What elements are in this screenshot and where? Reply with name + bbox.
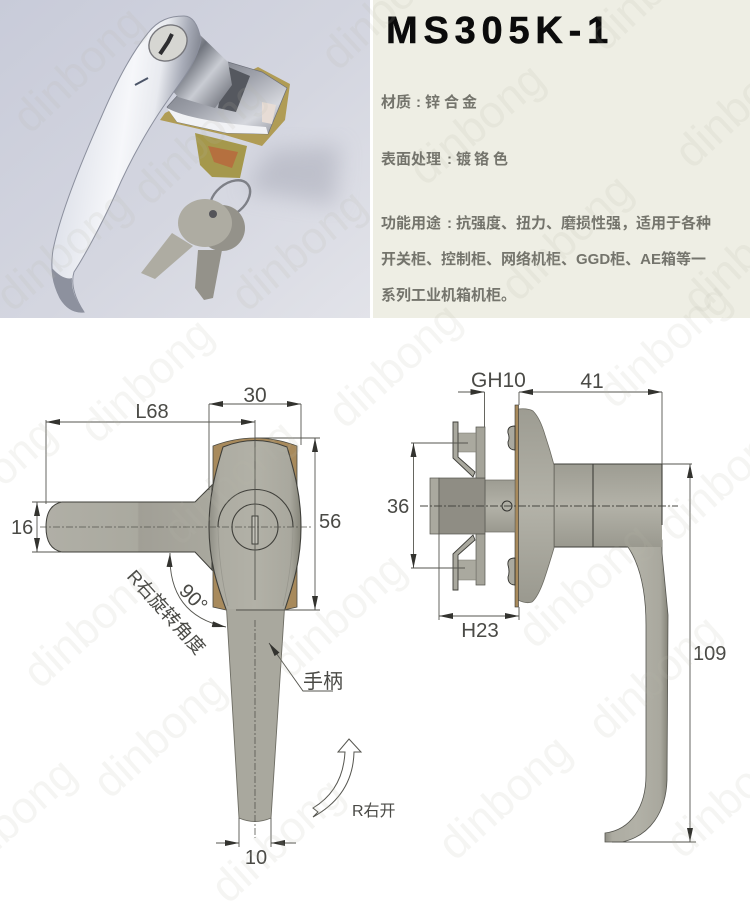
title: MS305K-1 <box>386 10 614 52</box>
icon: handle tip shading <box>52 268 84 312</box>
text: function line 1: 功能用途 <box>381 214 441 232</box>
label R open: R右开 <box>352 802 396 820</box>
front view drawing <box>11 384 396 869</box>
dome base <box>518 409 554 603</box>
text: material: : <box>416 94 421 111</box>
dimension 56 <box>236 438 341 610</box>
icon: key hole <box>209 210 217 218</box>
text: function line 1: : <box>447 215 452 232</box>
text: surface treatment: : <box>447 151 452 168</box>
dimension 36 <box>387 443 468 568</box>
handle cylinder <box>554 464 662 547</box>
handle leader <box>269 643 333 691</box>
watermarks: dinbong <box>508 512 661 657</box>
dimension 30 <box>209 384 301 490</box>
label handle: 手柄 <box>303 670 343 693</box>
label rotation angle: R右旋转角度 <box>123 566 209 658</box>
dimension L68: L68 <box>135 401 169 423</box>
icon: cam highlight <box>208 146 238 168</box>
icon: key ring <box>203 173 257 225</box>
dimension 109 <box>612 464 726 842</box>
icon: chrome handle <box>52 16 201 312</box>
rivet heads <box>508 426 515 585</box>
handle lower taper <box>226 600 285 822</box>
cylinder outline <box>554 464 662 547</box>
dimension GH10: GH10 <box>471 369 526 392</box>
icon: brass cam <box>195 133 247 178</box>
centre line <box>420 505 678 507</box>
text: material: 金 <box>462 93 477 111</box>
watermarks: dinbong <box>13 552 166 697</box>
watermarks: dinbong <box>70 307 223 452</box>
rotation arc 90 degrees <box>170 553 226 627</box>
dimension H23: H23 <box>461 619 499 642</box>
watermarks: dinbong <box>490 164 642 310</box>
watermarks: dinbong <box>588 272 741 417</box>
body inner side lines <box>218 527 293 606</box>
shaft <box>485 480 515 532</box>
icon: chrome mount dome <box>167 62 287 134</box>
dimension 16 <box>11 502 62 552</box>
watermarks: dinbong <box>318 292 471 437</box>
watermarks: dinbong <box>428 724 581 869</box>
dimension GH10 <box>458 369 526 427</box>
square cam <box>430 478 439 534</box>
dimension 16: 16 <box>11 517 33 539</box>
icon: mount lower bright strip <box>167 108 268 134</box>
centre lines <box>40 527 312 838</box>
pin <box>502 501 512 511</box>
key slot <box>252 516 258 544</box>
text: function line 1: 抗强度、扭力、磨损性强 <box>456 214 621 232</box>
text: surface treatment: 铬 <box>474 150 489 168</box>
panel: product photo <box>0 0 370 318</box>
icon: handle dash <box>135 78 148 85</box>
watermarks: dinbong <box>153 409 306 554</box>
side view drawing <box>387 369 726 842</box>
dimension 41: 41 <box>580 370 604 393</box>
bent brackets <box>453 422 475 590</box>
lock body outline <box>209 440 301 609</box>
label 90 degrees: 90° <box>174 580 211 617</box>
flanges <box>476 427 485 585</box>
brass back plate <box>213 438 297 610</box>
text: material: 合 <box>444 93 459 111</box>
text: surface treatment: 镀 <box>456 150 471 168</box>
dimension 30: 30 <box>243 384 267 407</box>
dimension 56: 56 <box>319 511 341 533</box>
text: function line 1: ， <box>621 215 636 232</box>
lock cylinder <box>232 504 278 550</box>
dimension 36: 36 <box>387 496 409 518</box>
watermarks: dinbong <box>578 604 731 749</box>
open direction arrow <box>313 739 361 817</box>
watermarks: dinbong <box>399 53 554 195</box>
icon: chrome barrel <box>170 33 232 108</box>
icon: key two <box>195 205 245 300</box>
handle notch <box>623 510 628 547</box>
body inner arch <box>218 490 293 527</box>
watermarks: dinbong <box>263 542 416 687</box>
icon: lock cylinder <box>142 18 194 68</box>
handle lever <box>605 540 668 842</box>
watermarks: dinbong <box>122 68 274 214</box>
dimension 41 <box>519 370 662 464</box>
icon: mount dark recess <box>218 66 250 112</box>
text: material: 材质 <box>381 93 411 111</box>
icon: key slot <box>160 34 172 54</box>
brass plate <box>515 405 518 607</box>
posts <box>458 433 476 580</box>
lock body fill <box>209 440 301 609</box>
watermarks: dinbong <box>221 179 376 321</box>
text: function line 2: 开关柜、控制柜、网络机柜、GGD柜、AE箱等一 <box>381 250 706 268</box>
dimension 10: 10 <box>245 847 267 869</box>
vertical datum <box>254 420 256 600</box>
text: function line 1: 适用于各种 <box>636 214 711 232</box>
icon: brass mounting plate <box>160 67 290 146</box>
dimension 10 <box>216 818 296 869</box>
dimension 109: 109 <box>693 643 726 665</box>
panel: specification <box>373 0 750 318</box>
horizontal handle arm <box>46 485 212 570</box>
text: function line 3: 系列工业机箱机柜。 <box>381 286 516 304</box>
square cam dark face <box>439 478 485 534</box>
text: surface treatment: 表面处理 <box>381 150 441 168</box>
dimension H23 <box>439 534 519 642</box>
icon: key one <box>141 199 232 279</box>
watermarks: dinbong <box>2 0 154 142</box>
icon: mount highlight <box>262 102 276 124</box>
watermarks: dinbong <box>83 662 236 807</box>
text: material: 锌 <box>425 94 440 111</box>
text: surface treatment: 色 <box>493 150 508 168</box>
